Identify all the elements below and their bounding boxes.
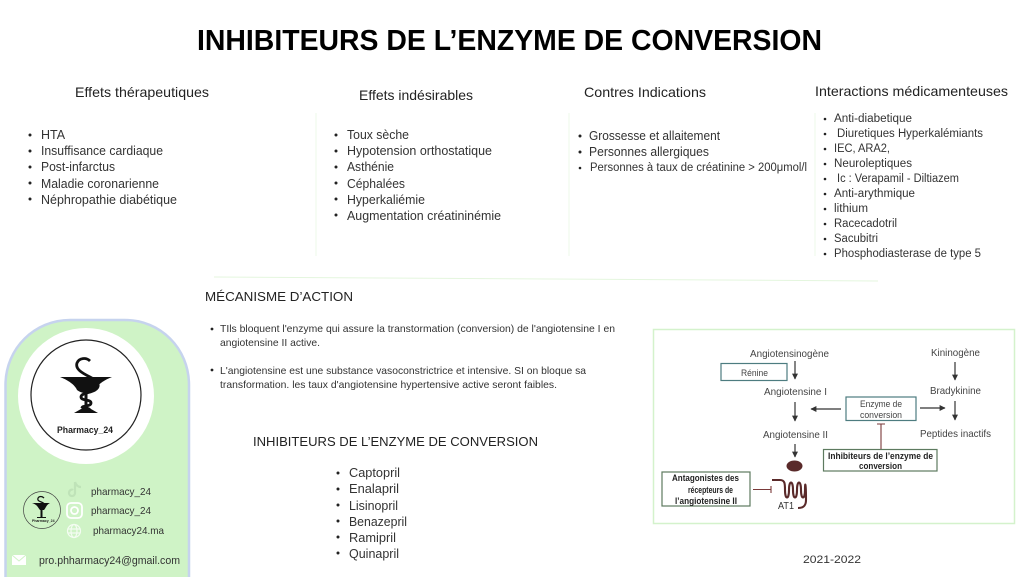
list: interactions médicamenteuses: Ic : Verapamil - Diltiazem (837, 173, 959, 185)
list: effets indésirables: Augmentation créatininémie (347, 209, 501, 223)
box: antagonistes: l’angiotensine II (675, 496, 737, 507)
list: inhibiteurs (336, 466, 407, 561)
small logo: Pharmacy_24 (32, 519, 55, 523)
box: inhibiteurs (824, 450, 937, 472)
list: effets indésirables: Hyperkaliémie (347, 193, 425, 207)
list: inhibiteurs: Lisinopril (349, 499, 398, 513)
list: effets thérapeutiques (28, 128, 177, 207)
title: INHIBITEURS DE L’ENZYME DE CONVERSION (197, 25, 822, 57)
inhibition lines (753, 424, 885, 493)
heading: interactions médicamenteuses: Interactions médicamenteuses (815, 83, 1008, 99)
ligand (786, 460, 802, 472)
pathway labels: Peptides inactifs (920, 428, 991, 440)
box: inhibiteurs: conversion (859, 461, 902, 472)
box: rénine: Rénine (741, 368, 768, 379)
box: rénine (721, 364, 787, 380)
small logo (24, 492, 60, 528)
list: interactions médicamenteuses: Phosphodiasterase de type 5 (834, 248, 981, 260)
icon: bowl of hygieia (60, 359, 112, 413)
year label: 2021-2022 (803, 554, 861, 566)
box: antagonistes: récepteurs de (688, 485, 733, 496)
heading: effets thérapeutiques: Effets thérapeutiques (75, 84, 209, 100)
panel: effets indésirables (334, 87, 501, 223)
pathway labels (750, 347, 991, 512)
receptor AT1 (772, 480, 806, 508)
text block: mécanisme d'action: angiotensine II active. (220, 337, 320, 349)
list: interactions médicamenteuses: Anti-arythmique (834, 188, 915, 200)
list: contre-indications: Personnes allergiques (589, 145, 709, 159)
list: effets thérapeutiques: Post-infarctus (41, 160, 115, 174)
list: interactions médicamenteuses (824, 113, 983, 260)
arrows (795, 361, 955, 457)
list: interactions médicamenteuses: Diuretiques Hyperkalémiants (837, 128, 983, 140)
diagram frame (654, 330, 1014, 524)
box: inhibiteurs: Inhibiteurs de l’enzyme de (828, 451, 933, 462)
pathway labels: Kininogène (931, 347, 980, 359)
list: interactions médicamenteuses: Racecadotril (834, 218, 897, 230)
pathway labels: Angiotensine II (763, 429, 828, 441)
list: effets indésirables: Toux sèche (347, 128, 409, 142)
list: inhibiteurs: Benazepril (349, 515, 407, 529)
panel: pharmacy sidebar (6, 320, 189, 577)
list: interactions médicamenteuses: IEC, ARA2, (834, 143, 890, 155)
pathway labels: Bradykinine (930, 385, 981, 397)
box: antagonistes: Antagonistes des (672, 473, 739, 484)
icon: tiktok (69, 482, 81, 496)
list: interactions médicamenteuses: Sacubitri (834, 233, 878, 245)
list: effets indésirables (334, 128, 501, 223)
list: contre-indications: Personnes à taux de créatinine > 200μmol/l (590, 162, 807, 174)
label: website: pharmacy24.ma (93, 525, 164, 537)
heading: mécanisme d'action: MÉCANISME D’ACTION (205, 289, 353, 304)
box: enzyme de conversion: conversion (860, 410, 902, 421)
panel: contre-indications (578, 84, 807, 174)
panel: effets thérapeutiques (28, 84, 209, 207)
list: interactions médicamenteuses: lithium (834, 203, 868, 215)
text block: mécanisme d'action (211, 323, 615, 391)
list: effets indésirables: Céphalées (347, 177, 405, 191)
text block: mécanisme d'action: TIls bloquent l'enzyme qui assure la transtormation (conversion) de l'angiotensine I en (220, 323, 615, 335)
list: contre-indications: Grossesse et allaitement (589, 129, 721, 143)
icon: globe (68, 524, 80, 538)
list: effets indésirables: Asthénie (347, 160, 394, 174)
text block: mécanisme d'action: L'angiotensine est une substance vasoconstrictrice et intensive. SI on bloque sa (220, 365, 586, 377)
list: effets thérapeutiques: HTA (41, 128, 66, 142)
label: email: pro.phharmacy24@gmail.com (39, 555, 180, 567)
list: effets thérapeutiques: Néphropathie diabétique (41, 193, 177, 207)
list: interactions médicamenteuses: Neuroleptiques (834, 158, 912, 170)
heading: effets indésirables: Effets indésirables (359, 87, 473, 103)
white logo disc (18, 328, 154, 464)
box: antagonistes (662, 472, 750, 507)
pathway labels: Angiotensinogène (750, 348, 829, 360)
pathway labels: Angiotensine I (764, 386, 827, 398)
box: enzyme de conversion (846, 397, 916, 421)
list: inhibiteurs: Enalapril (349, 482, 399, 496)
panel: interactions médicamenteuses (815, 83, 1008, 260)
logo: pharmacy (31, 340, 141, 450)
text block: mécanisme d'action: transformation. les taux d'angiotensine hypertensive active seront faibles. (220, 379, 557, 391)
pathway labels: AT1 (778, 500, 794, 512)
list: effets thérapeutiques: Maladie coronarienne (41, 177, 159, 191)
list: contre-indications (578, 129, 807, 174)
panel: pathway diagram (654, 330, 1014, 524)
sidebar background (6, 320, 189, 577)
list: effets thérapeutiques: Insuffisance cardiaque (41, 144, 163, 158)
icon: instagram (67, 503, 82, 518)
list: effets indésirables: Hypotension orthostatique (347, 144, 492, 158)
list: inhibiteurs: Ramipril (349, 531, 396, 545)
logo name: Pharmacy_24 (57, 425, 113, 435)
list: interactions médicamenteuses: Anti-diabetique (834, 113, 912, 125)
label: tiktok: pharmacy_24 (91, 486, 151, 498)
list: inhibiteurs: Quinapril (349, 547, 399, 561)
label: instagram: pharmacy_24 (91, 505, 151, 517)
heading: inhibiteurs de l'enzyme de conversion: INHIBITEURS DE L’ENZYME DE CONVERSION (253, 434, 538, 449)
box: enzyme de conversion: Enzyme de (860, 399, 902, 410)
icon: mail (12, 555, 26, 565)
list: inhibiteurs: Captopril (349, 466, 400, 480)
heading: contres indications: Contres Indications (584, 84, 706, 100)
